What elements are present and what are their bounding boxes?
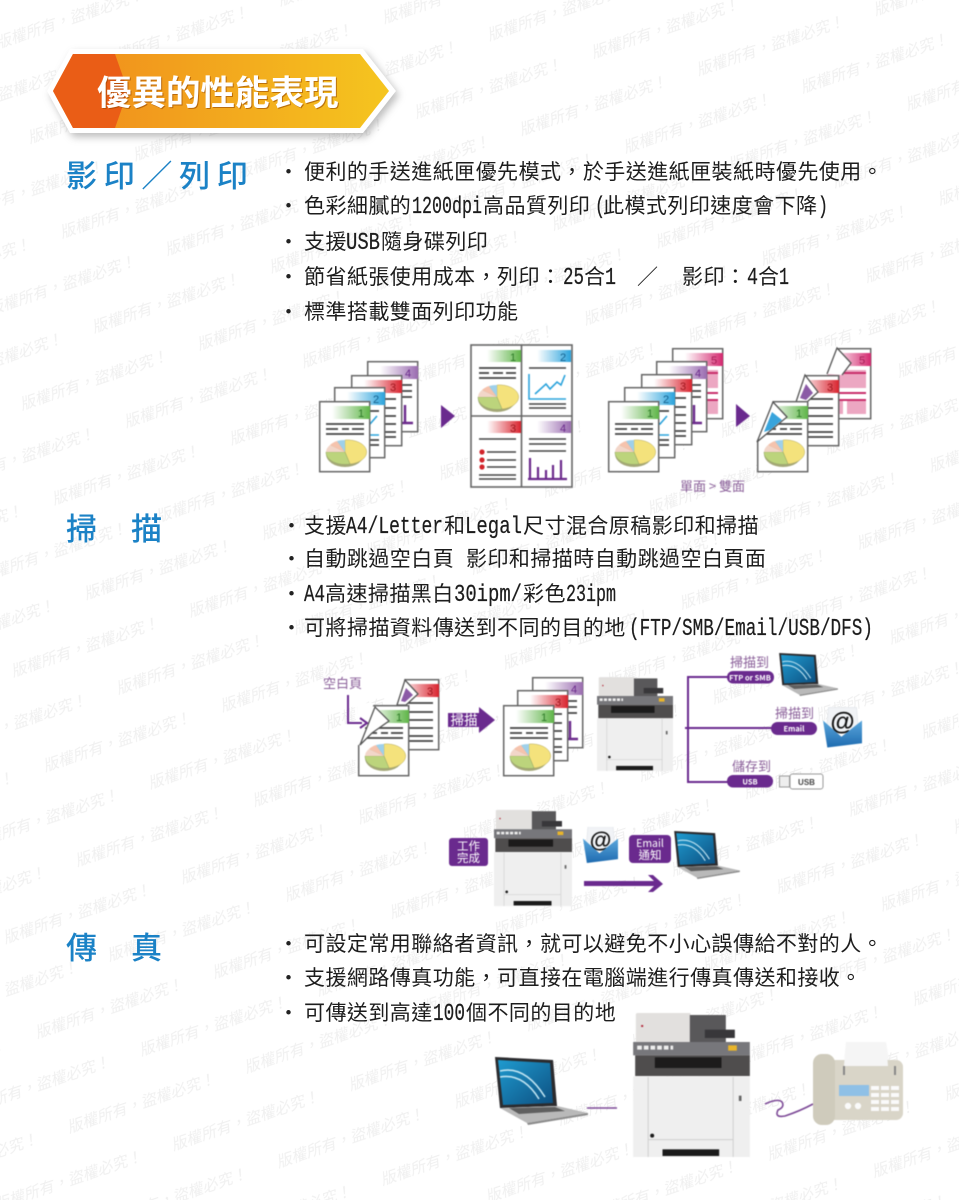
text block: copy and print features: 合	[584, 261, 605, 291]
destination: Email: 掃描到	[775, 703, 814, 722]
title banner	[47, 49, 396, 133]
arrow: scan: 掃描	[450, 709, 478, 729]
text block: fax features: 可傳送到高達	[304, 997, 433, 1027]
diagram: single to duplex: 4	[695, 368, 701, 380]
arrow	[584, 875, 663, 892]
text block: scan features: ・	[281, 510, 302, 540]
destination: Email: @	[830, 708, 855, 736]
envelope	[582, 827, 619, 864]
text block: scan features: A4	[304, 582, 325, 609]
text block: scan features: 30ipm/	[454, 582, 522, 609]
heading: fax	[66, 923, 162, 968]
label: job finished: 完成	[457, 850, 480, 866]
diagram: skip blank page scan	[323, 652, 862, 789]
text block: copy and print features: 隨身碟列印	[381, 226, 488, 256]
text block: scan features: ・	[281, 612, 302, 642]
4-up sheet	[471, 345, 572, 487]
diagram: 4-in-1 page combine: 2	[373, 394, 379, 406]
scanned stack: 3	[555, 697, 561, 709]
text block: copy and print features: )	[818, 194, 828, 221]
heading: copy and print: 影印／列印	[66, 151, 254, 196]
printer	[493, 810, 573, 906]
diagram: single to duplex	[609, 346, 871, 495]
destination: FTP or SMB	[727, 652, 838, 696]
duplex sheets	[756, 346, 871, 472]
text block: scan features: 和	[444, 510, 465, 540]
text block: copy and print features: ・	[278, 156, 299, 186]
scan destination lines	[685, 677, 772, 782]
text block: fax features: 支援網路傳真功能，可直接在電腦端進行傳真傳送和接收。	[304, 962, 862, 992]
text block: copy and print features: 合	[758, 261, 779, 291]
destination: USB: USB	[742, 776, 758, 788]
laptop	[494, 1056, 588, 1126]
sheet with blank back: 3	[427, 686, 433, 698]
diagram: 4-in-1 page combine: 3	[390, 382, 396, 394]
laptop	[674, 830, 740, 880]
text block: copy and print features: 此模式列印速度會下降	[603, 190, 818, 220]
text block: copy and print features: 1	[605, 265, 616, 292]
text block: copy and print features: 4	[747, 265, 758, 292]
fax machine	[813, 1042, 903, 1125]
text block: scan features: 支援	[304, 510, 347, 540]
heading: fax: 真	[131, 923, 162, 968]
label: blank page: 空白頁	[323, 673, 362, 692]
heading: scan: 描	[131, 504, 162, 549]
text block: copy and print features: (	[595, 194, 605, 221]
destination: FTP or SMB: 掃描到	[730, 652, 769, 671]
label: job finished: 工作	[457, 838, 480, 854]
text block: scan features: 高速掃描黑白	[325, 578, 454, 608]
destination: Email	[771, 703, 862, 748]
text block: fax features	[278, 928, 883, 1028]
text block: copy and print features: ・	[278, 261, 299, 291]
text block: scan features: Legal	[465, 514, 522, 541]
text block: copy and print features: 便利的手送進紙匣優先模式，於手送進紙匣裝紙時優先使用。	[304, 156, 883, 186]
line: laptop to printer	[587, 1107, 617, 1109]
text block: scan features: 自動跳過空白頁	[304, 543, 454, 573]
text block: scan features: 彩色	[523, 578, 566, 608]
text block: copy and print features: ・	[278, 226, 299, 256]
label: job finished	[449, 838, 488, 866]
diagram: single to duplex: 1	[647, 408, 653, 420]
diagram: single to duplex: 2	[663, 394, 669, 406]
text block: copy and print features	[278, 156, 883, 326]
arrow	[736, 404, 750, 427]
text block: scan features: ・	[281, 543, 302, 573]
text block: copy and print features: ・	[278, 296, 299, 326]
diagram: 4-in-1 page combine: 4	[405, 368, 411, 380]
text block: copy and print features: ・	[278, 190, 299, 220]
text block: copy and print features: 支援	[304, 226, 347, 256]
scanned stack: 4	[571, 684, 577, 696]
text block: copy and print features: 影印：	[682, 261, 746, 291]
diagram: single to duplex: 3	[680, 381, 686, 393]
label: email notice	[629, 835, 671, 863]
text block: copy and print features: 色彩細膩的	[304, 190, 411, 220]
text block: copy and print features: ／	[637, 261, 658, 291]
duplex sheets: 5	[859, 355, 865, 367]
scanned stack: 1	[541, 712, 547, 724]
destination: USB	[727, 756, 823, 789]
diagram: 4-in-1 page combine: 1	[358, 408, 364, 420]
destination: USB: 儲存到	[732, 756, 771, 775]
sheet with blank back	[357, 677, 439, 776]
arrow	[441, 405, 455, 428]
text block: scan features: 影印和掃描時自動跳過空白頁面	[466, 543, 766, 573]
text block: scan features: 可將掃描資料傳送到不同的目的地	[304, 612, 626, 642]
arrow: blank page pointer	[348, 695, 367, 728]
heading: scan	[66, 504, 162, 549]
cable	[765, 1100, 813, 1116]
4-up sheet: 1	[510, 352, 516, 364]
4-up sheet: 4	[560, 423, 566, 435]
text block: scan features: (FTP/SMB/Email/USB/DFS)	[629, 616, 873, 643]
duplex sheets: 1	[796, 408, 802, 420]
scanned stack	[504, 678, 583, 776]
4-up sheet: 2	[560, 352, 566, 364]
text block: copy and print features: 高品質列印	[483, 190, 590, 220]
text block: fax features: 100	[433, 1001, 465, 1028]
sheet with blank back: 1	[396, 712, 402, 724]
diagram: job finished email notice	[449, 810, 740, 906]
text block: copy and print features: 標準搭載雙面列印功能	[304, 296, 518, 326]
text block: copy and print features: 節省紙張使用成本，列印：	[304, 261, 561, 291]
text block: fax features: ・	[278, 962, 299, 992]
text block: copy and print features: USB	[346, 230, 380, 257]
text block: fax features: 個不同的目的地	[466, 997, 616, 1027]
destination: USB: USB	[798, 778, 815, 787]
text block: scan features: 23ipm	[566, 582, 616, 609]
envelope: @	[590, 827, 611, 852]
diagram: single to duplex: 5	[711, 355, 717, 367]
text block: scan features	[281, 510, 873, 643]
printer	[596, 676, 674, 772]
4-up sheet: 3	[510, 423, 516, 435]
text block: fax features: 可設定常用聯絡者資訊，就可以避免不小心誤傳給不對的人。	[304, 928, 883, 958]
text block: copy and print features: 25	[563, 265, 584, 292]
text block: fax features: ・	[278, 997, 299, 1027]
heading: scan: 掃	[66, 504, 97, 549]
heading: fax: 傳	[66, 923, 97, 968]
text block: copy and print features: 1200dpi	[412, 194, 482, 221]
diagram: network fax	[495, 1013, 903, 1157]
title banner: 優異的性能表現	[97, 75, 338, 113]
destination: Email: Email	[784, 724, 805, 734]
printer	[632, 1012, 751, 1158]
text block: fax features: ・	[278, 928, 299, 958]
diagram: 4-in-1 page combine	[320, 345, 572, 487]
text block: scan features: ・	[281, 578, 302, 608]
label: email notice: 通知	[638, 847, 662, 863]
label: email notice: Email	[636, 836, 664, 851]
destination: FTP or SMB: FTP or SMB	[729, 672, 771, 684]
duplex sheets: 3	[827, 382, 833, 394]
text block: scan features: 尺寸混合原稿影印和掃描	[523, 510, 759, 540]
arrow: scan	[448, 707, 495, 733]
text block: copy and print features: 1	[779, 265, 789, 292]
text block: scan features: A4/Letter	[346, 514, 443, 541]
label: single to duplex: 單面 > 雙面	[680, 476, 745, 495]
